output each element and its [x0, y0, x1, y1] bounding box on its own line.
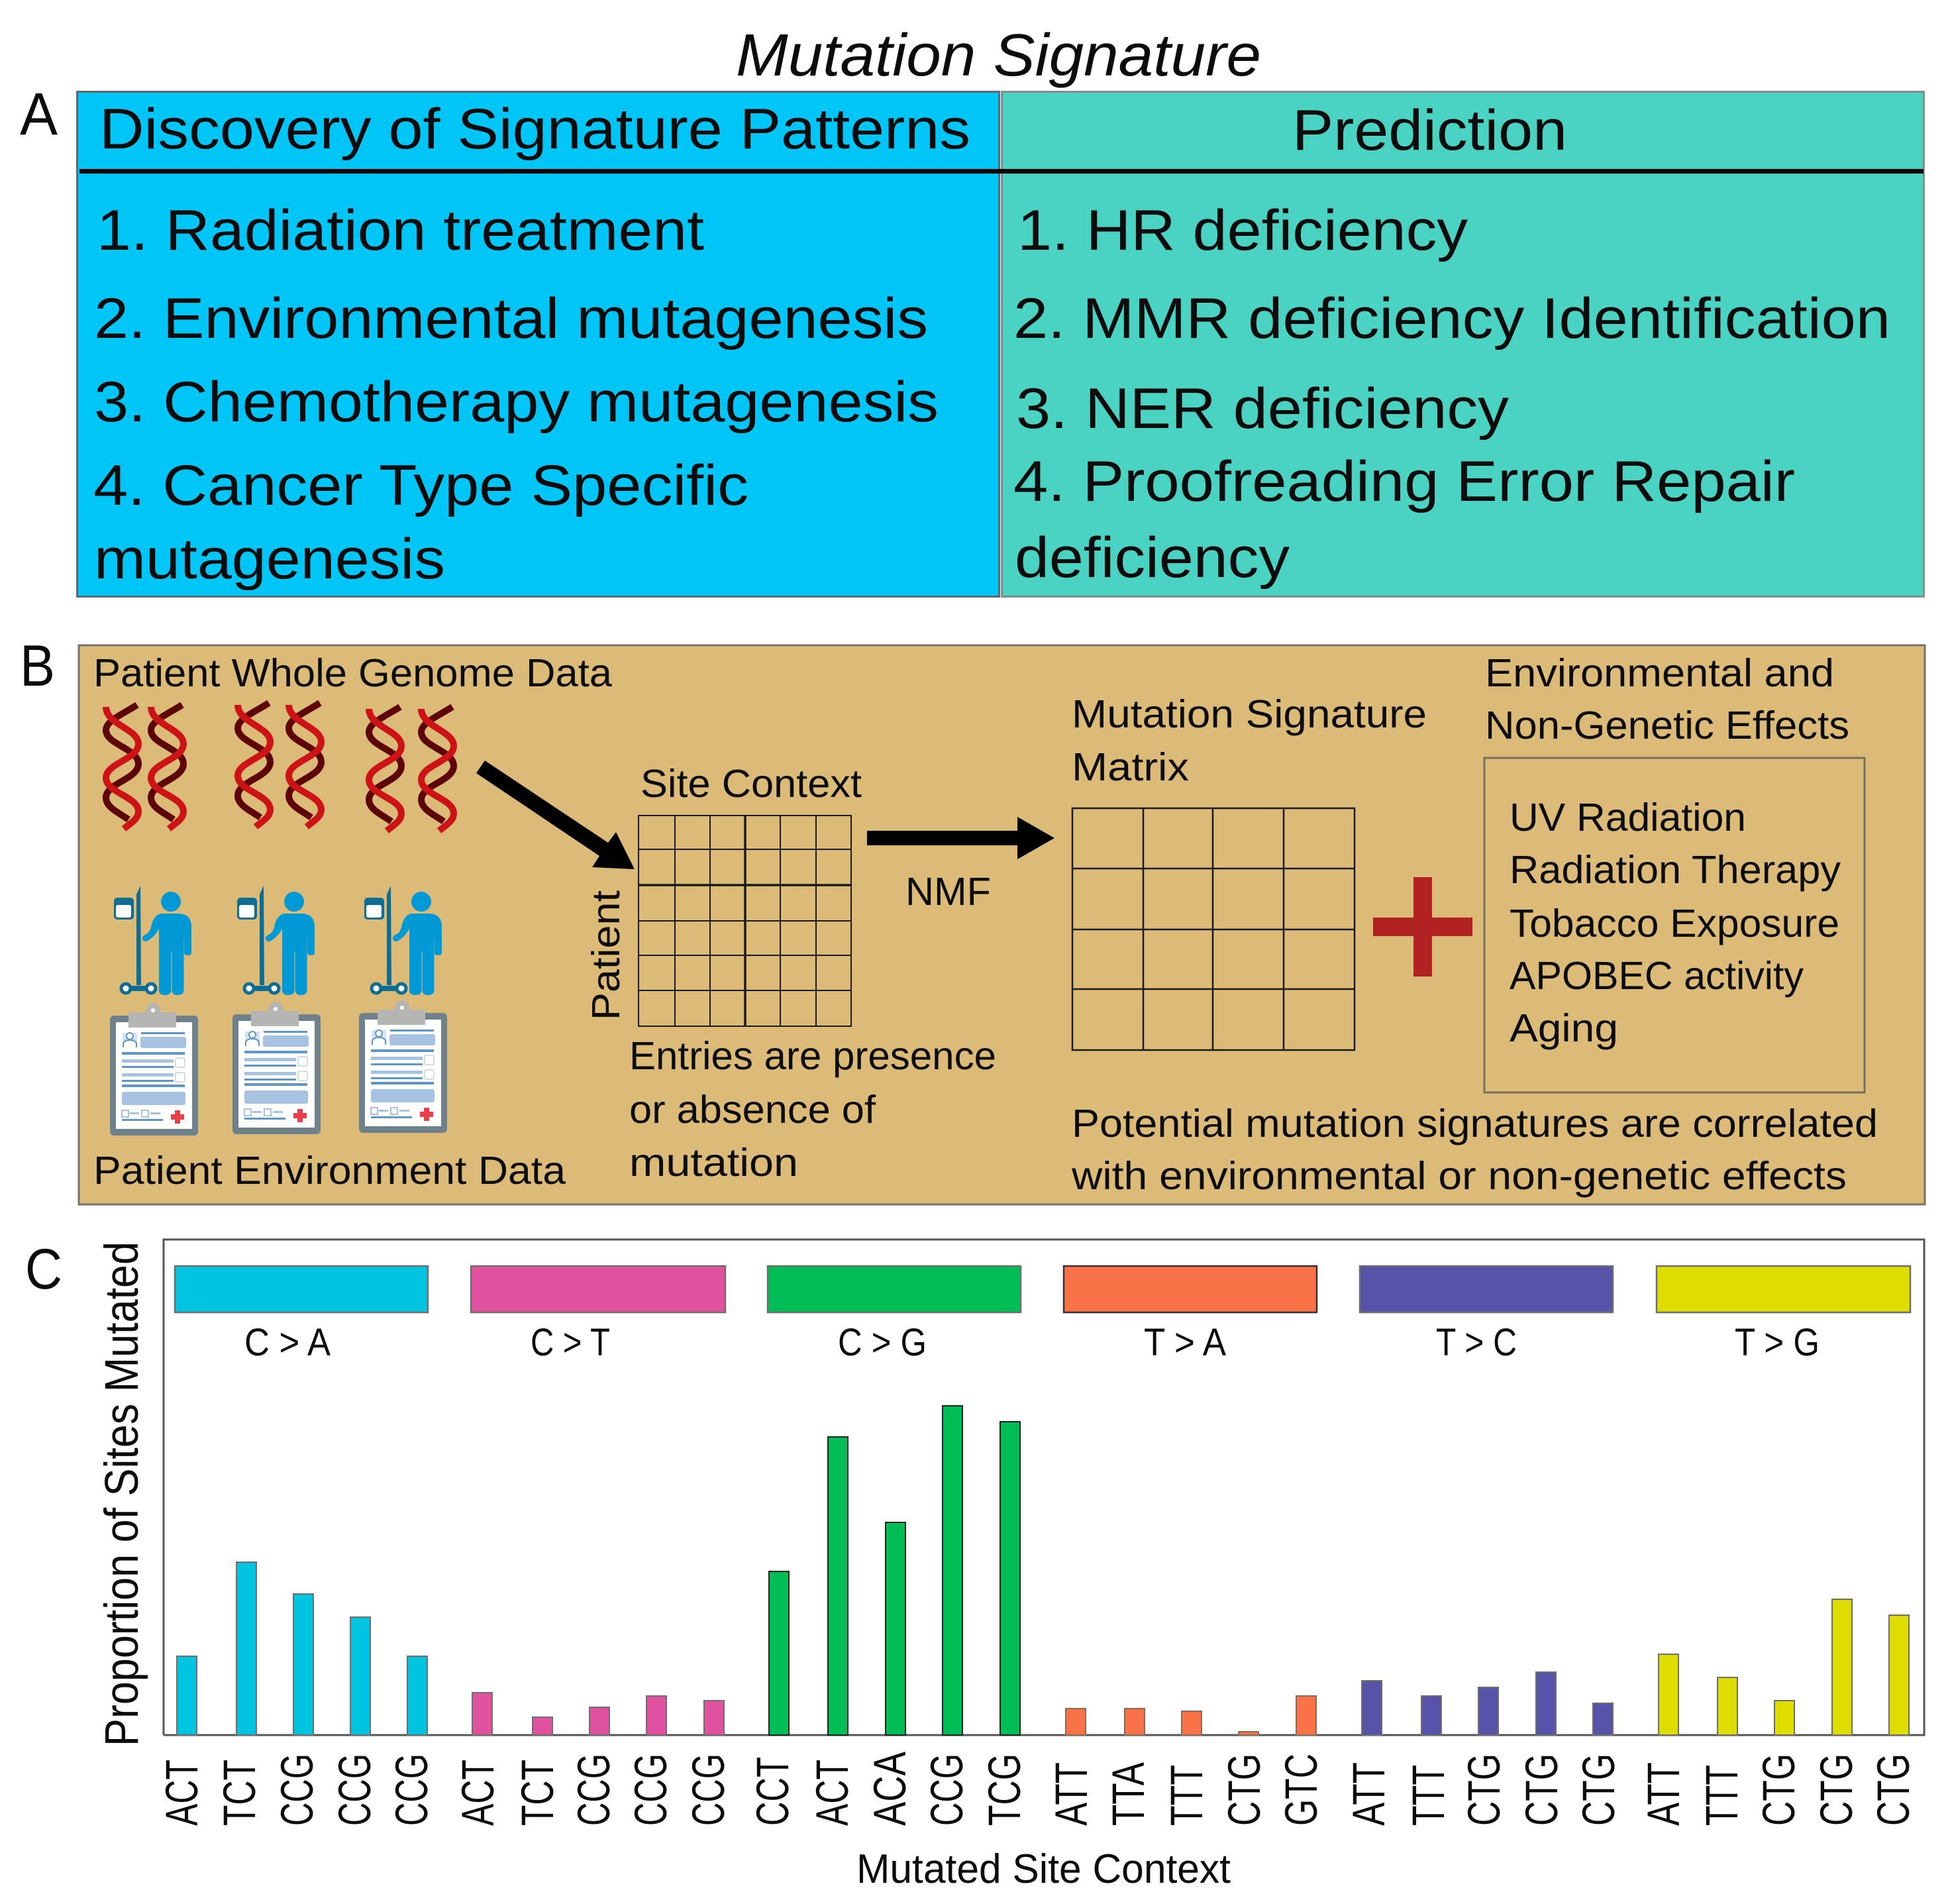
- label: patient axis: Patient: [584, 890, 628, 1020]
- legend labels: [244, 1321, 1820, 1364]
- x axis tick labels: TCG: [979, 1754, 1030, 1826]
- label: patient environment data: Patient Environment Data: [93, 1149, 566, 1192]
- x axis tick labels: ATT: [1046, 1762, 1097, 1826]
- x axis tick labels: TTT: [1403, 1765, 1454, 1826]
- x axis tick labels: ACA: [864, 1752, 915, 1826]
- text: entries description: mutation: [629, 1141, 798, 1185]
- bars: T>G: [1659, 1599, 1909, 1735]
- arrow: NMF: [867, 817, 1054, 859]
- label: patient whole genome data: Patient Whole Genome Data: [93, 651, 612, 695]
- x axis tick labels: CCG: [272, 1754, 323, 1826]
- text: correlation note: [1071, 1102, 1878, 1198]
- x axis tick labels: TCT: [214, 1760, 265, 1826]
- prediction item 3: 3. NER deficiency: [1016, 377, 1509, 441]
- icons: DNA helices: [106, 703, 454, 831]
- title: Mutation Signature: [736, 23, 1261, 89]
- item 4 line 1: 4. Cancer Type Specific: [93, 454, 748, 517]
- x axis tick labels: ATT: [1638, 1762, 1689, 1826]
- x axis tick labels: CCT: [747, 1757, 798, 1826]
- x axis tick labels: CCG: [625, 1754, 676, 1826]
- item 3: 3. Chemotherapy mutagenesis: [94, 370, 939, 434]
- prediction item 4 line 1: 4. Proofreading Error Repair: [1013, 450, 1795, 513]
- x axis tick labels: CCG: [921, 1754, 972, 1826]
- prediction item 4 line 2: deficiency: [1015, 526, 1290, 590]
- box: environmental effects list: APOBEC activity: [1510, 954, 1804, 998]
- item 1: 1. Radiation treatment: [97, 199, 704, 262]
- box: environmental effects list: [1484, 758, 1865, 1092]
- x axis tick labels: TCT: [512, 1760, 563, 1826]
- x axis tick labels: CCG: [568, 1754, 619, 1826]
- legend labels: C > T: [531, 1321, 610, 1364]
- box: environmental effects list: Aging: [1510, 1006, 1618, 1050]
- x axis tick labels: CCG: [329, 1754, 380, 1826]
- prediction item 1: 1. HR deficiency: [1017, 199, 1468, 262]
- panel B: workflow: [79, 645, 1925, 1204]
- x axis tick labels: CTG: [1811, 1754, 1862, 1826]
- text: entries description: Entries are presence: [629, 1034, 996, 1078]
- icon: plus: [1373, 877, 1472, 977]
- label: environmental and non-genetic effects: Environmental and: [1485, 651, 1834, 695]
- x axis tick labels: CTG: [1219, 1754, 1270, 1826]
- chart frame: [164, 1240, 1924, 1735]
- label: environmental and non-genetic effects: Non-Genetic Effects: [1485, 704, 1849, 747]
- legend labels: T > C: [1436, 1321, 1517, 1364]
- x axis tick labels: TTT: [1696, 1765, 1747, 1826]
- x axis tick labels: TTT: [1161, 1765, 1212, 1826]
- label: NMF: NMF: [905, 870, 991, 914]
- bars: C>G: [769, 1406, 1020, 1735]
- panel C label: C: [25, 1238, 62, 1301]
- panel A label: A: [20, 81, 58, 148]
- x axis tick labels: CTG: [1573, 1754, 1624, 1826]
- x axis label: Mutated Site Context: [856, 1846, 1231, 1892]
- y axis label: Proportion of Sites Mutated: [96, 1242, 148, 1746]
- box: environmental effects list: Radiation Therapy: [1510, 848, 1841, 892]
- bars: C>A: [177, 1562, 427, 1735]
- box: environmental effects list: Tobacco Exposure: [1510, 902, 1839, 945]
- text: correlation note: Potential mutation signatures are correlated: [1072, 1102, 1878, 1145]
- text: correlation note: with environmental or non-genetic effects: [1071, 1154, 1847, 1198]
- label: mutation signature matrix: Mutation Signature: [1072, 692, 1427, 736]
- heading: discovery: Discovery of Signature Patterns: [99, 97, 970, 161]
- x axis tick labels: TTA: [1103, 1762, 1154, 1826]
- icons: clipboards: [110, 1000, 447, 1136]
- panel A: prediction: [1001, 91, 1924, 596]
- x axis tick labels: ACT: [156, 1760, 207, 1826]
- item 4 line 2: mutagenesis: [94, 527, 445, 591]
- x axis tick labels: CTG: [1753, 1754, 1804, 1826]
- legend labels: C > G: [838, 1321, 927, 1364]
- x axis tick labels: CCG: [683, 1754, 734, 1826]
- x axis tick labels: CTG: [1459, 1754, 1510, 1826]
- mutation signature matrix grid: [1072, 808, 1355, 1050]
- bars: T>C: [1362, 1672, 1613, 1735]
- legend labels: T > A: [1144, 1321, 1226, 1364]
- text: entries description: or absence of: [629, 1088, 876, 1132]
- prediction item 2: 2. MMR deficiency Identification: [1013, 287, 1890, 350]
- legend labels: T > G: [1735, 1321, 1820, 1364]
- bars: C>T: [472, 1693, 724, 1735]
- heading: prediction: Prediction: [1292, 99, 1567, 162]
- x axis tick labels: CTG: [1516, 1754, 1567, 1826]
- x axis tick labels: ACT: [452, 1760, 503, 1826]
- x axis tick labels: ACT: [807, 1760, 858, 1826]
- panel C: bar chart: [164, 1240, 1924, 1735]
- bars: T>A: [1066, 1696, 1316, 1735]
- site context grid: [639, 816, 851, 1026]
- panel B label: B: [20, 633, 55, 698]
- legend labels: C > A: [244, 1321, 331, 1364]
- arrow: data to site context: [476, 761, 635, 869]
- label: site context: Site Context: [641, 762, 862, 806]
- x axis tick labels: GTC: [1276, 1754, 1327, 1826]
- x axis tick labels: [156, 1752, 1919, 1826]
- label: mutation signature matrix: [1072, 692, 1427, 789]
- x axis tick labels: ATT: [1343, 1762, 1394, 1826]
- legend swatches: [175, 1266, 1910, 1312]
- label: environmental and non-genetic effects: [1485, 651, 1849, 747]
- x axis tick labels: CCG: [386, 1754, 437, 1826]
- box: environmental effects list: UV Radiation: [1510, 796, 1746, 839]
- label: mutation signature matrix: Matrix: [1072, 745, 1189, 789]
- item 2: 2. Environmental mutagenesis: [94, 287, 928, 350]
- x axis tick labels: CTG: [1868, 1754, 1919, 1826]
- panel A: discovery of signature patterns: [77, 91, 999, 596]
- icons: patients with IV poles: [114, 886, 442, 995]
- text: entries description: [629, 1034, 996, 1185]
